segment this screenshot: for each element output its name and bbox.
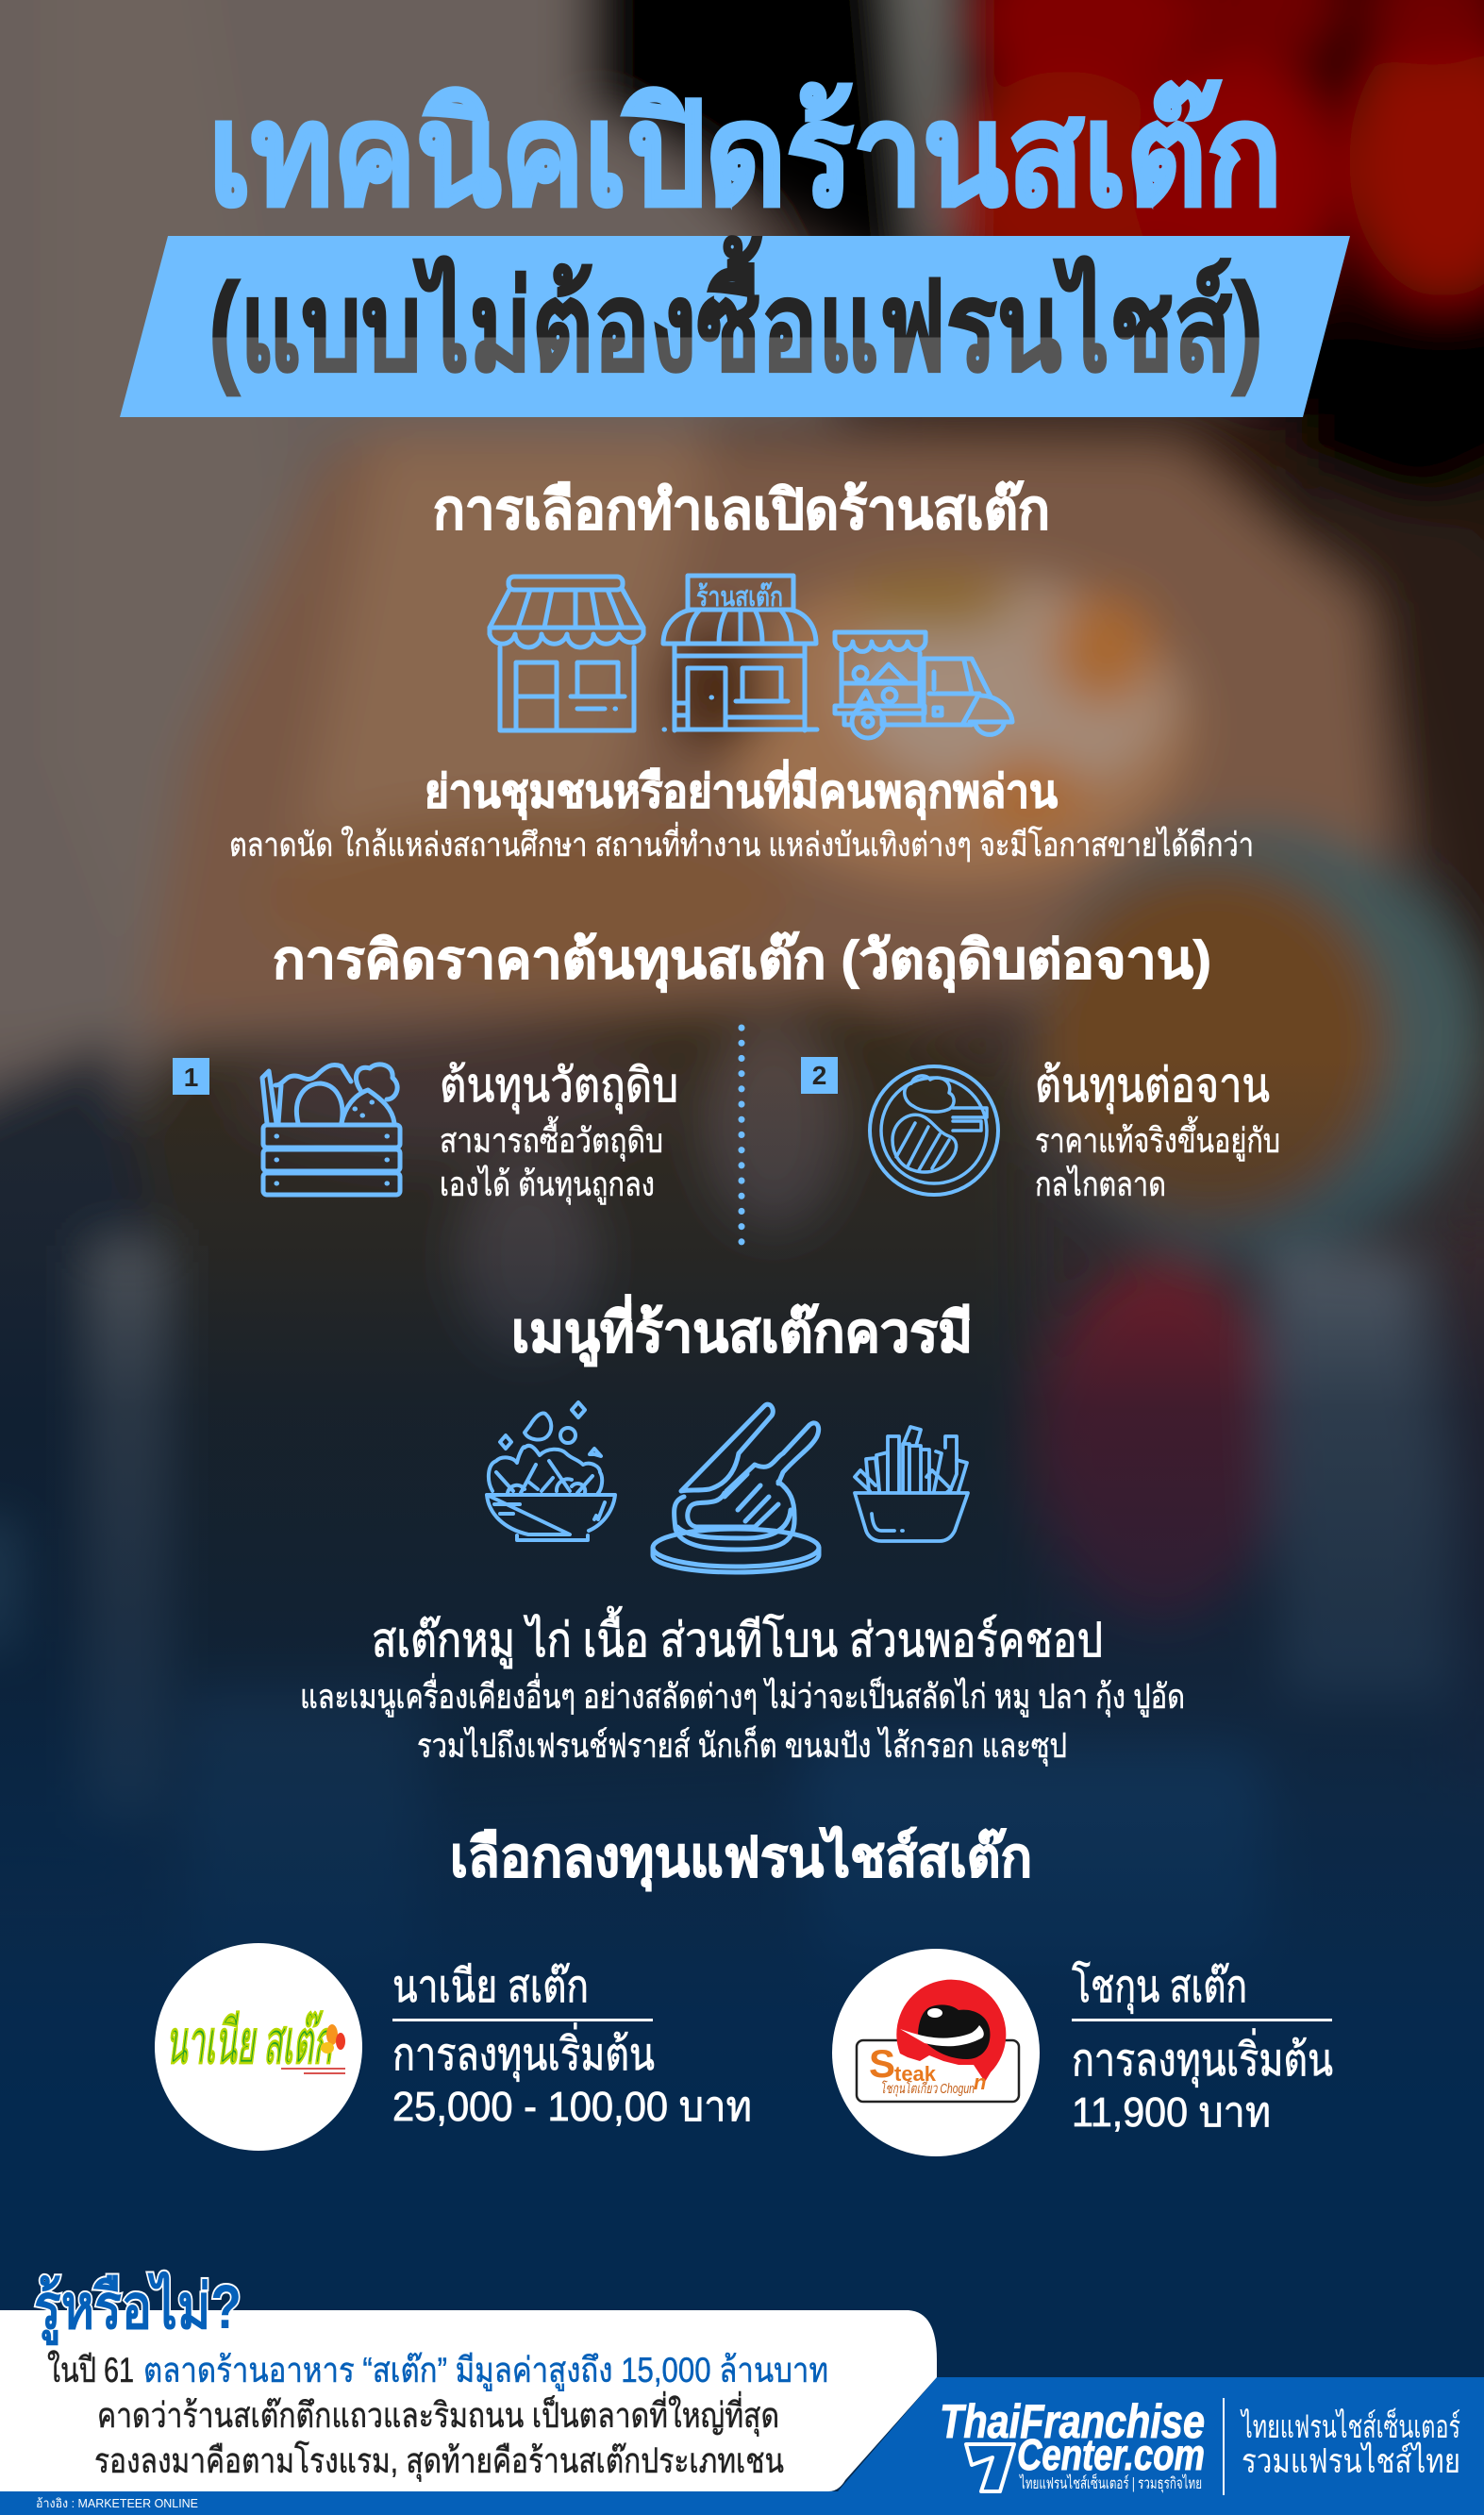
logo: Steak Shogun xyxy=(832,1949,1040,2156)
badge 2: 2 xyxy=(812,1061,826,1090)
text: raw material line 2: เองได้ ต้นทุนถูกลง xyxy=(440,1165,655,1205)
panel: franchise Nania xyxy=(155,1943,752,2151)
location text xyxy=(229,759,1254,863)
panel: did you know xyxy=(0,2271,937,2491)
text: plate line 1: ราคาแท้จริงขึ้นอยู่กับ xyxy=(1035,1115,1280,1162)
heading: location: การเลือกทำเลเปิดร้านสเต๊ก xyxy=(433,479,1050,541)
logo: ThaiFranchise Center: ไทยแฟรนไชส์เซ็นเตอร์ | รวมธุรกิจไทย xyxy=(1019,2473,1202,2493)
heading: cost: การคิดราคาต้นทุนสเต๊ก (วัตถุดิบต่อจาน) xyxy=(273,930,1211,993)
menu detail line 1: และเมนูเครื่องเคียงอื่นๆ อย่างสลัดต่างๆ ไม่ว่าจะเป็นสลัดไก่ หมู ปลา กุ้ง ปูอัด xyxy=(300,1673,1185,1718)
dotted divider xyxy=(738,1028,745,1242)
panel: cost per plate xyxy=(801,1057,1280,1203)
icons: shops and food truck xyxy=(490,576,1012,738)
badge 2 xyxy=(801,1057,838,1094)
logo: Nania Steak xyxy=(155,1943,362,2151)
icon: french fries xyxy=(855,1427,968,1541)
fact line 2: คาดว่าร้านสเต๊กตึกแถวและริมถนน เป็นตลาดที่ใหญ่ที่สุด xyxy=(97,2390,779,2437)
logo: ThaiFranchise Center: ThaiFranchise xyxy=(940,2395,1205,2448)
label: starting investment: การลงทุนเริ่มต้น xyxy=(1072,2028,1333,2087)
logo: Steak Shogun: teak xyxy=(894,2062,937,2086)
logo: ThaiFranchise Center xyxy=(940,2395,1205,2493)
icon: salad bowl xyxy=(487,1402,615,1540)
location text: ย่านชุมชนหรือย่านที่มีคนพลุกพล่าน xyxy=(425,759,1058,820)
badge 1: 1 xyxy=(184,1063,198,1092)
logo: Steak Shogun: โชกุนโตเกียว Chogun xyxy=(880,2080,975,2097)
price: Shogun: 11,900 บาท xyxy=(1072,2089,1271,2136)
title: เทคนิคเปิดร้านสเต๊ก xyxy=(208,75,1282,234)
subtitle banner xyxy=(120,235,1350,417)
icon sign text: ร้านสเต๊ก xyxy=(696,581,783,612)
heading: menu: เมนูที่ร้านสเต๊กควรมี xyxy=(511,1294,973,1366)
icon: shop with awning xyxy=(490,577,643,730)
did you know heading: รู้หรือไม่? xyxy=(34,2271,242,2346)
icon: vegetable crate xyxy=(262,1065,400,1195)
panel: raw material cost xyxy=(173,1058,678,1205)
label: starting investment: การลงทุนเริ่มต้น xyxy=(392,2022,655,2082)
menu text: สเต๊กหมู ไก่ เนื้อ ส่วนทีโบน ส่วนพอร์คชอป xyxy=(372,1606,1103,1668)
logo: Nania Steak: นาเนีย สเต๊ก xyxy=(166,2008,334,2076)
arrow mark xyxy=(966,2444,1014,2491)
source note: อ้างอิง : MARKETEER ONLINE xyxy=(36,2496,198,2510)
text: cost per plate: ต้นทุนต่อจาน xyxy=(1035,1059,1270,1114)
fact line 1: ในปี 61 xyxy=(47,2350,134,2389)
tagline xyxy=(1240,2407,1460,2480)
heading: franchise: เลือกลงทุนแฟรนไชส์สเต๊ก xyxy=(450,1826,1032,1892)
icon: steak plate xyxy=(870,1066,998,1195)
logo: Steak Shogun: S xyxy=(869,2041,895,2086)
icon: steak with knife and fork xyxy=(653,1404,819,1572)
icons: menu items xyxy=(487,1402,968,1572)
location detail: ตลาดนัด ใกล้แหล่งสถานศึกษา สถานที่ทำงาน แหล่งบันเทิงต่างๆ จะมีโอกาสขายได้ดีกว่า xyxy=(229,822,1254,863)
fact line 3: รองลงมาคือตามโรงแรม, สุดท้ายคือร้านสเต๊กประเภทเชน xyxy=(94,2440,784,2482)
price: Nania: 25,000 - 100,00 บาท xyxy=(392,2084,752,2130)
panel: franchise Shogun xyxy=(832,1949,1333,2156)
logo: ThaiFranchise Center: Center.com xyxy=(1017,2430,1205,2479)
text: raw material line 1: สามารถซื้อวัตถุดิบ xyxy=(440,1115,663,1162)
name: Shogun: โชกุน สเต๊ก xyxy=(1072,1960,1247,2014)
badge 1 xyxy=(173,1058,209,1095)
name: Nania: นาเนีย สเต๊ก xyxy=(392,1962,589,2012)
icon: steak shop with sign xyxy=(663,576,817,730)
text: plate line 2: กลไกตลาด xyxy=(1035,1165,1166,1203)
logo: Steak Shogun: n xyxy=(974,2071,986,2094)
text: raw material cost: ต้นทุนวัตถุดิบ xyxy=(440,1059,678,1114)
menu detail line 2: รวมไปถึงเฟรนช์ฟรายส์ นักเก็ต ขนมปัง ไส้กรอก และซุป xyxy=(417,1724,1067,1767)
menu text xyxy=(300,1606,1185,1767)
footer band xyxy=(0,2377,1484,2515)
fact line 1: ตลาดร้านอาหาร “สเต๊ก” มีมูลค่าสูงถึง 15,000 ล้านบาท xyxy=(143,2351,828,2391)
icon: food truck xyxy=(835,632,1012,738)
